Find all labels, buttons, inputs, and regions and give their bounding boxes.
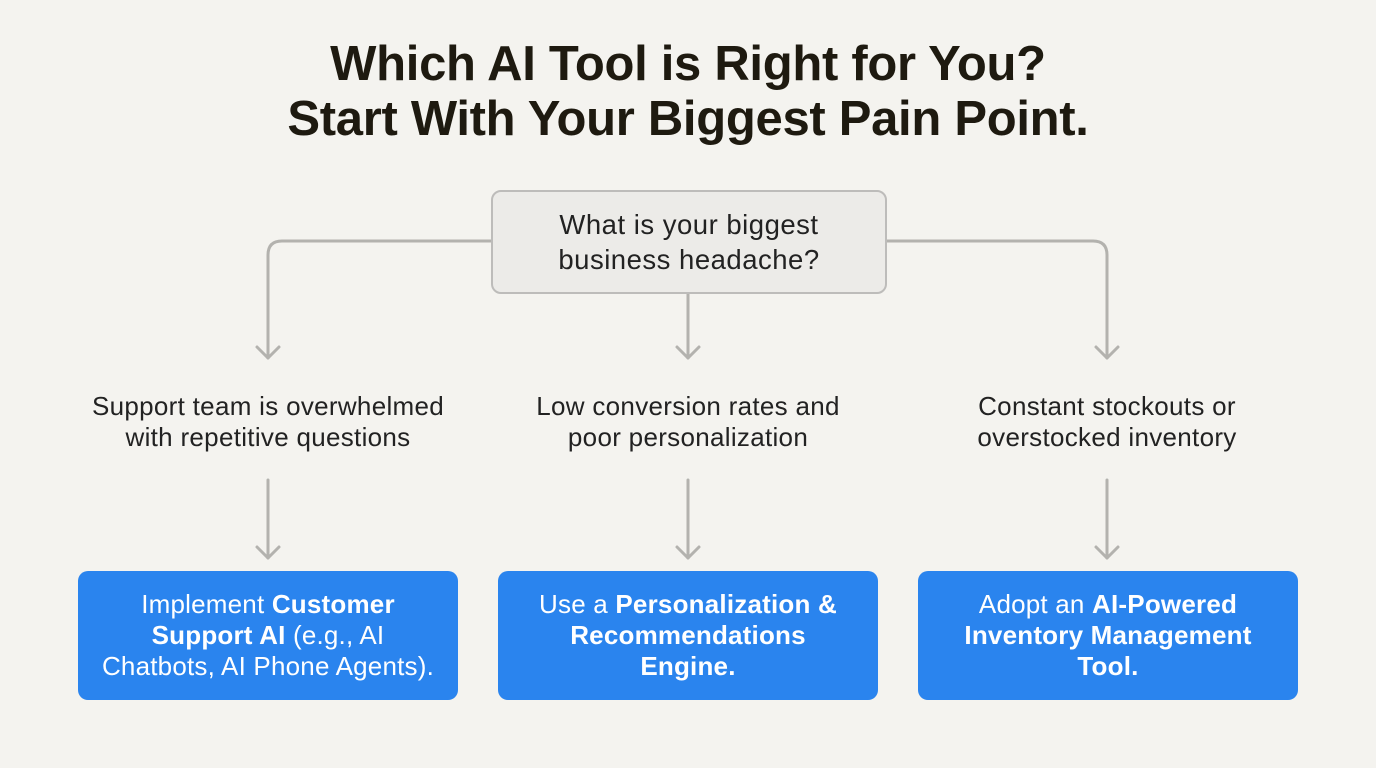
title bbox=[287, 37, 1089, 146]
pain point: inventory: Constant stockouts or bbox=[978, 391, 1236, 421]
solution: customer support AI: Implement Customer bbox=[141, 589, 395, 619]
solution: personalization engine: Engine. bbox=[640, 651, 736, 681]
title: Start With Your Biggest Pain Point. bbox=[287, 92, 1089, 146]
solution: inventory tool bbox=[918, 571, 1298, 700]
solution: customer support AI: Support AI (e.g., AI bbox=[152, 620, 384, 650]
pain point: support bbox=[92, 391, 444, 452]
question box: What is your biggest bbox=[559, 209, 819, 240]
pain point: conversion bbox=[536, 391, 840, 452]
title: Which AI Tool is Right for You? bbox=[330, 37, 1046, 91]
solution: personalization engine bbox=[498, 571, 878, 700]
pain point: inventory: overstocked inventory bbox=[977, 422, 1237, 452]
pain point: inventory bbox=[977, 391, 1237, 452]
pain point: conversion: poor personalization bbox=[568, 422, 808, 452]
question box: business headache? bbox=[558, 244, 820, 275]
pain point: conversion: Low conversion rates and bbox=[536, 391, 840, 421]
solution: inventory tool: Adopt an AI-Powered bbox=[979, 589, 1237, 619]
pain point: support: with repetitive questions bbox=[126, 422, 410, 452]
solution: customer support AI: Chatbots, AI Phone Agents). bbox=[102, 651, 434, 681]
solution: personalization engine: Recommendations bbox=[570, 620, 806, 650]
solution: personalization engine: Use a Personalization & bbox=[539, 589, 837, 619]
question box bbox=[491, 190, 887, 294]
solution: inventory tool: Inventory Management bbox=[964, 620, 1252, 650]
pain point: support: Support team is overwhelmed bbox=[92, 391, 444, 421]
solution: customer support AI bbox=[78, 571, 458, 700]
solution: inventory tool: Tool. bbox=[1077, 651, 1139, 681]
